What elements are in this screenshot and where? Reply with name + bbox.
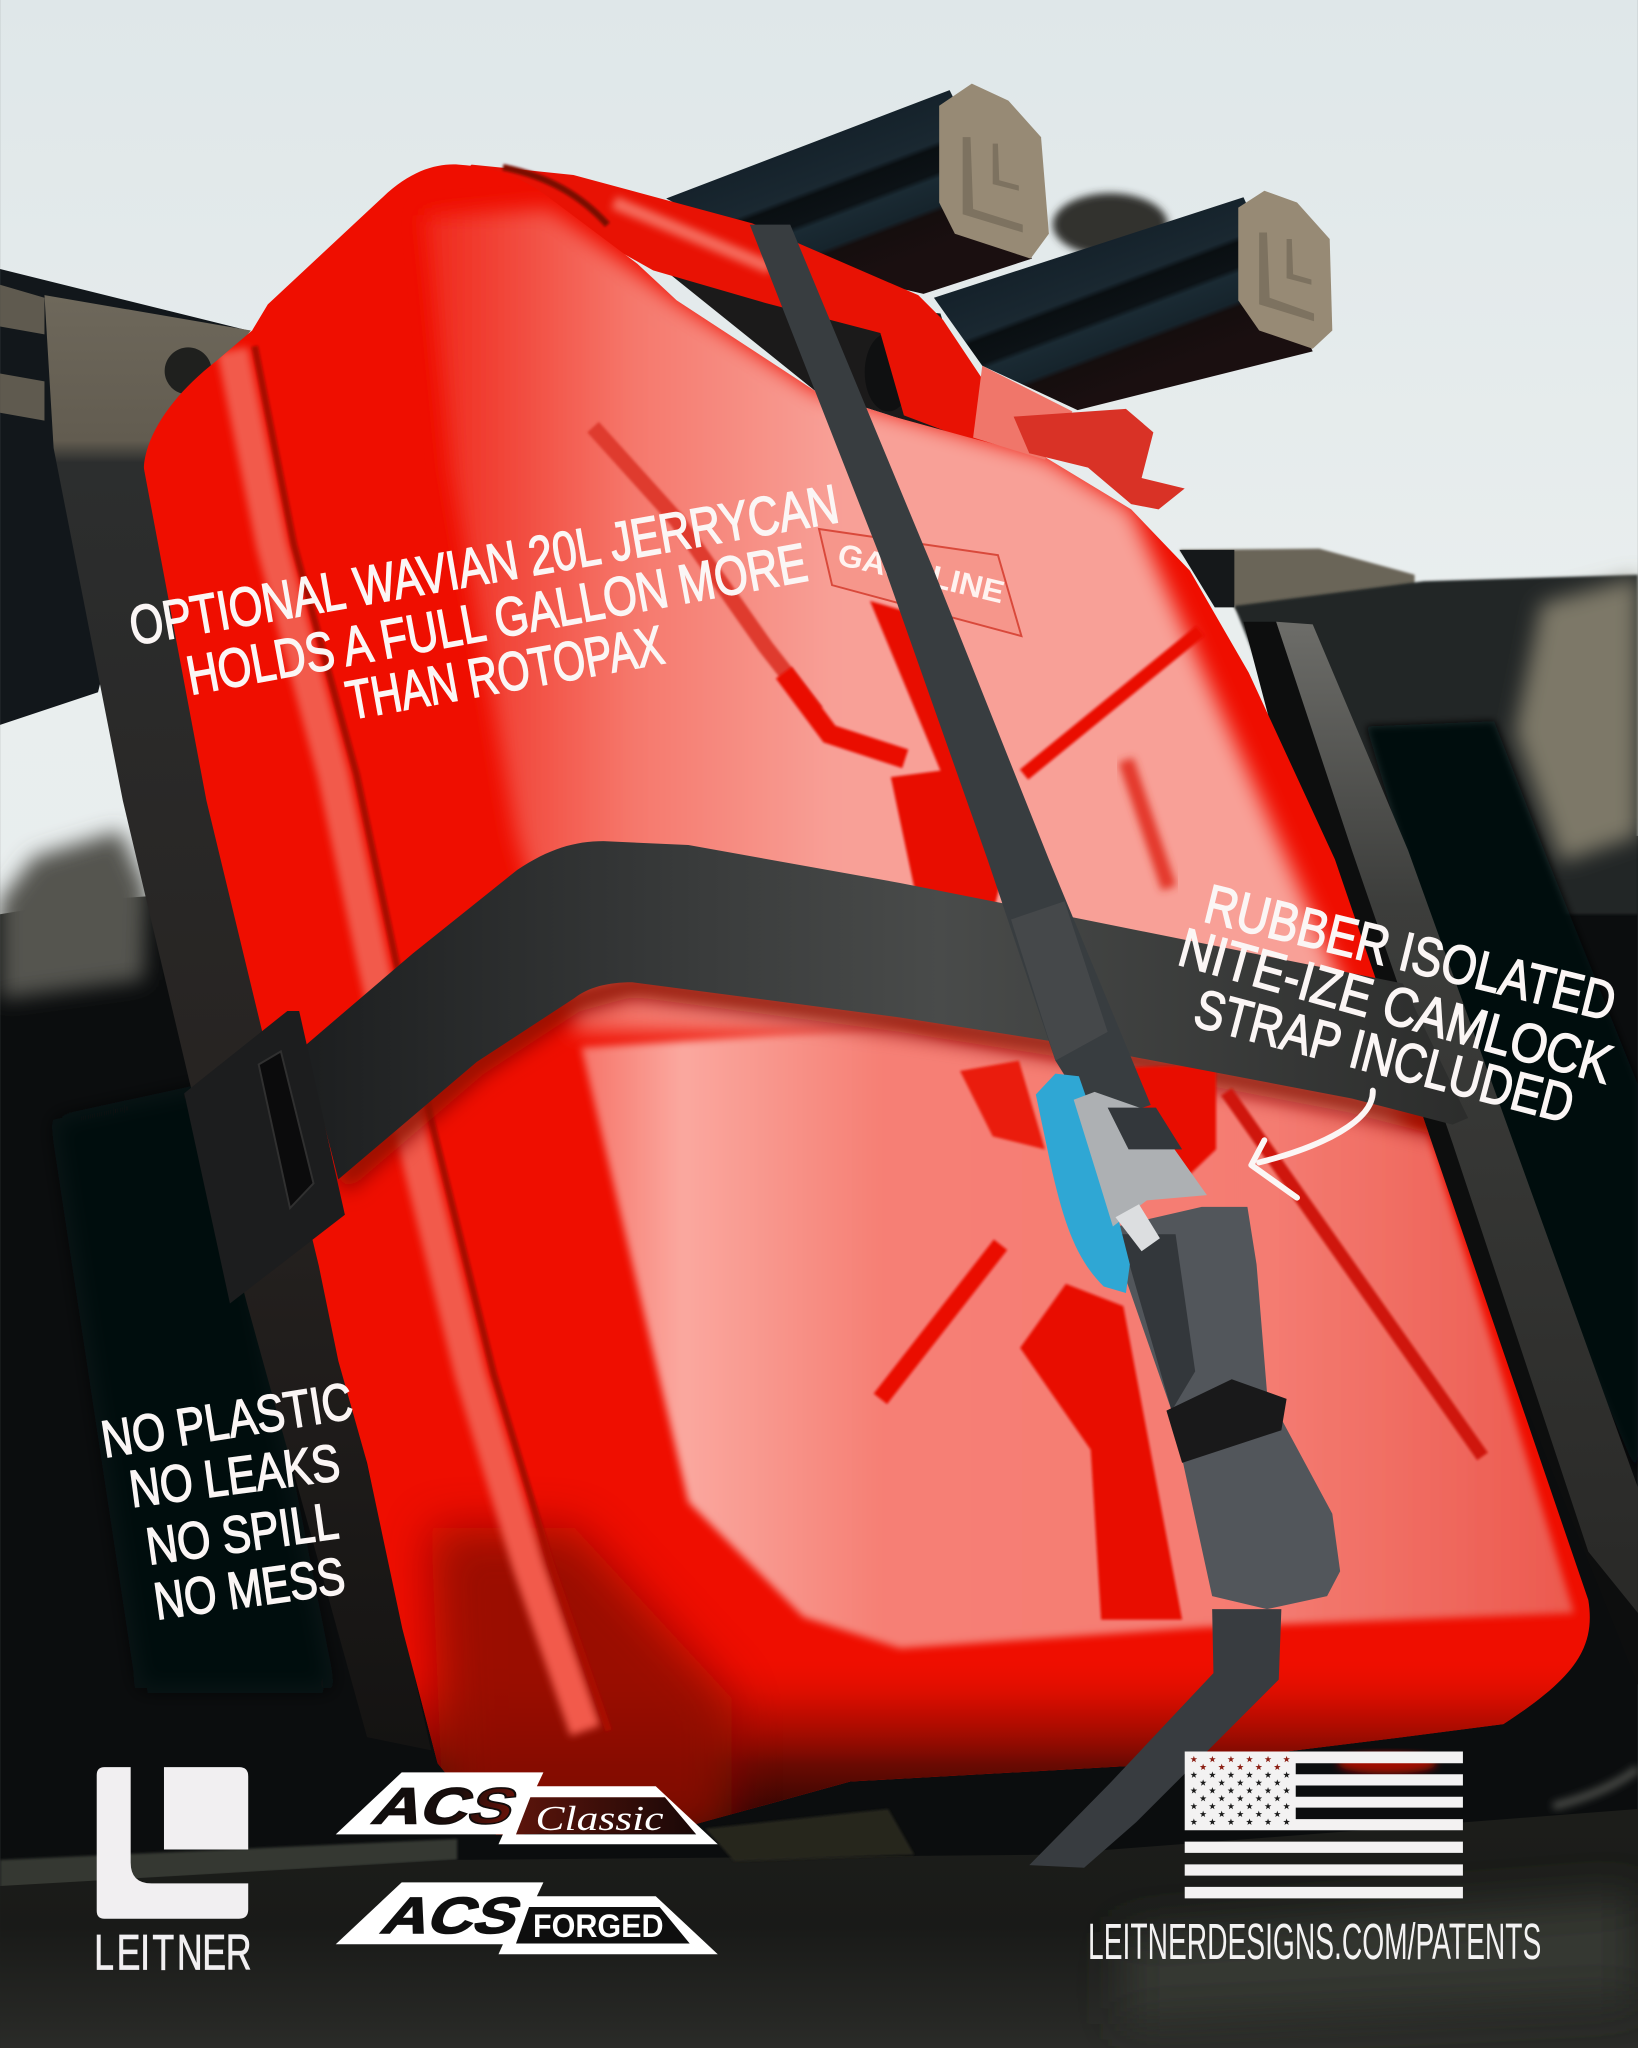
ACS letters: ACS [374, 1888, 530, 1945]
upper face highlight [425, 209, 1411, 1136]
jerrycan handle [459, 165, 1032, 453]
ACS letters: ACS [365, 1778, 526, 1835]
bar one [666, 90, 1032, 294]
callout: Wavian jerrycan capacity [125, 472, 843, 731]
handle shine [614, 202, 771, 268]
plate shape [819, 529, 1021, 636]
red reflection beneath can [1338, 1753, 1437, 1774]
rear cab top edge [1179, 549, 1415, 614]
dark opening [637, 248, 980, 444]
jerrycan body [131, 157, 1607, 1855]
red small patch left of buckle [960, 1061, 1045, 1149]
strap tail loop [1117, 1207, 1340, 1609]
tie-down strap [750, 225, 1340, 1868]
bar two [934, 197, 1313, 410]
strap stitching [1011, 901, 1108, 1061]
band shadow [340, 985, 1452, 1182]
channel bright lower [784, 673, 905, 759]
left cab top [0, 831, 146, 999]
rack mounting plate and side rails [0, 269, 1638, 1750]
arrow pointing to buckle [1251, 1091, 1373, 1198]
jerrycan handle window [637, 248, 980, 444]
Classic word: Classic [536, 1799, 664, 1838]
line two: HOLDS A FULL GALLON MORE [182, 531, 812, 707]
base red [131, 157, 1607, 1855]
cab roof [1234, 575, 1638, 914]
clamp slot [259, 1051, 314, 1208]
badge: ACS Forged [336, 1882, 718, 1954]
bed floor [0, 1809, 1638, 2048]
callout: no plastic list [97, 1373, 357, 1631]
band clamp [184, 1011, 345, 1304]
L mark [97, 1767, 248, 1919]
logo: Leitner [94, 1767, 252, 1981]
left crossbars [0, 269, 248, 725]
end cap two logo [1259, 232, 1314, 321]
lower emboss left [880, 1245, 1001, 1399]
rubber isolator [1036, 1074, 1130, 1293]
icon: monochrome American flag [1185, 1752, 1463, 1898]
rack hardware behind handle [865, 333, 912, 411]
lower left dark shading [431, 1528, 731, 1842]
upper strap [750, 225, 1151, 1123]
badge window [516, 1907, 690, 1944]
buckle opening [1108, 1108, 1182, 1149]
spout latch [1014, 409, 1185, 509]
crossbar highlight top [0, 285, 44, 334]
badge window [516, 1797, 696, 1834]
end cap one logo [963, 137, 1023, 232]
upper X stroke right [1024, 631, 1200, 775]
floor lighter strip right [1123, 1894, 1638, 2024]
plate bolt [165, 347, 212, 394]
rear cab dark end [1179, 550, 1234, 607]
gasoline plate [819, 529, 1021, 636]
handle dark groove [503, 167, 607, 225]
lower face highlight [581, 1027, 1574, 1648]
line four: NO MESS [150, 1547, 349, 1631]
spout base [973, 366, 1072, 460]
buckle body [1074, 1092, 1207, 1226]
dark truck mass [0, 836, 1638, 2048]
side seam [255, 346, 609, 1731]
buckle roller [1115, 1204, 1160, 1251]
line three: THAN ROTOPAX [341, 614, 668, 731]
bed rail line [0, 1839, 457, 1889]
right wheel arch curve [1553, 1768, 1638, 1806]
flag canton and stripes [1185, 1752, 1463, 1898]
tail inner shadow [1121, 1234, 1195, 1411]
line three: NO SPILL [143, 1492, 342, 1577]
seam pink stripe [233, 350, 585, 1731]
lower centre reflection [1020, 1284, 1182, 1620]
crossbar highlight lower [0, 374, 44, 421]
end cap two [1238, 191, 1332, 349]
line one: NO PLASTIC [97, 1373, 357, 1469]
red behind buckle [1134, 1064, 1218, 1174]
velcro keeper [1166, 1379, 1287, 1463]
right rail black edge [1243, 622, 1638, 1685]
badge: ACS Classic [336, 1772, 718, 1844]
blurred mount behind rack [1053, 193, 1168, 256]
badge frame [336, 1772, 718, 1844]
flag stars [1191, 1756, 1290, 1825]
badge frame [336, 1882, 718, 1954]
left cab inner window [59, 1091, 327, 1685]
band [304, 841, 1468, 1179]
background: truck cab and bed, dark and out of focus [0, 549, 1638, 2048]
handle tube [459, 165, 1032, 453]
cab side highlight [1515, 577, 1638, 862]
lower emboss right [1227, 1092, 1483, 1456]
roof rack bars with tan end caps [666, 84, 1332, 410]
bottom dark shading [414, 1672, 1567, 1835]
right rail [1276, 622, 1638, 1613]
bed bracket foot [705, 1809, 914, 1861]
square mark [164, 1767, 248, 1849]
lower strap [1029, 1609, 1281, 1868]
line one: OPTIONAL WAVIAN 20L JERRYCAN [125, 472, 843, 657]
callout: rubber isolated camlock strap [1172, 872, 1622, 1135]
mounting plate [44, 295, 431, 1750]
end cap one [939, 84, 1049, 259]
metal retaining band [184, 841, 1468, 1304]
wordmark: LEITNER [94, 1926, 252, 1981]
spout and latch [973, 366, 1185, 509]
upper embossed channel [593, 427, 816, 712]
plate text: GASOLINE [834, 537, 1008, 610]
right channel [1126, 760, 1169, 888]
cam buckle with blue rubber guard [1036, 1074, 1207, 1293]
upper vertical red patch [870, 601, 1006, 914]
Forged word: FORGED [533, 1907, 664, 1944]
line two: NO LEAKS [126, 1434, 343, 1519]
cab window [1366, 721, 1638, 1476]
